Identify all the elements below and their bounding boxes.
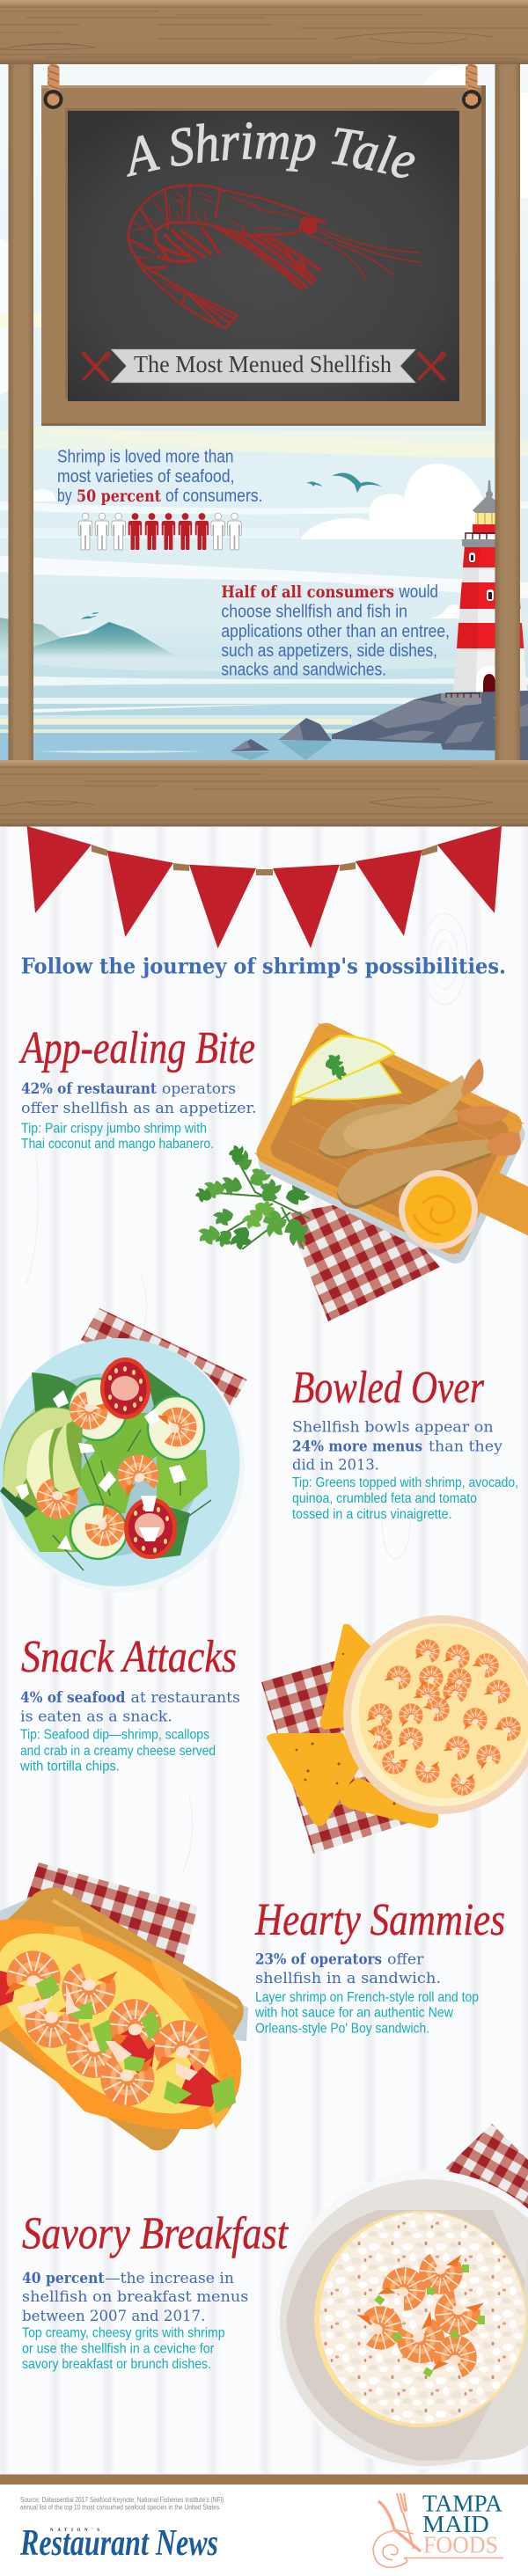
logo: Tampa Maid Foods: MAID [422, 2511, 489, 2537]
logo: Tampa Maid Foods: FOODS [423, 2532, 498, 2558]
logo: Nation's Restaurant News: Restaurant News [19, 2523, 218, 2564]
sauce cup [399, 1170, 478, 1249]
text: shrimp is loved [57, 448, 262, 506]
rope and rings left [46, 64, 62, 107]
text: breakfast tip: or use the shellfish in a ceviche for [22, 2341, 215, 2356]
rocks [231, 691, 528, 760]
text: bowls stat [292, 1419, 502, 1475]
icon: crossed fork and knife right [419, 352, 445, 379]
text: appetizer stat: operators [162, 1080, 236, 1098]
napkin [20, 1862, 198, 1966]
plate [275, 2170, 528, 2470]
bun [0, 1919, 241, 2129]
text: half of all consumers: choose shellfish and fish in [221, 603, 407, 622]
illustration: salad bowl [0, 1308, 247, 1592]
logo: Tampa Maid Foods: TAMPA [422, 2490, 503, 2516]
logo: Tampa Maid Foods [373, 2490, 503, 2567]
pictogram: 5 of 10 people in red [78, 513, 241, 550]
text: snack tip: and crab in a creamy cheese served [20, 1744, 216, 1759]
lighthouse [453, 480, 527, 699]
text: breakfast stat [22, 2270, 248, 2325]
text: bowls tip: quinoa, crumbled feta and tomato [292, 1491, 477, 1506]
logo: Nation's Restaurant News: NATION'S [50, 2528, 99, 2533]
footer wood strip [0, 2474, 528, 2485]
text: snack stat: is eaten as a snack. [20, 1709, 172, 1726]
heading: bowled over: Bowled Over [292, 1363, 485, 1413]
heading: app-ealing bite: App-ealing Bite [18, 1023, 255, 1073]
text: breakfast stat: shellfish on breakfast menus [22, 2288, 248, 2306]
top wooden beam [0, 0, 528, 64]
text: shrimp is loved: most varieties of seafood, [57, 467, 234, 487]
text: half of all consumers: such as appetizers, side dishes, [221, 641, 437, 661]
text: sandwich stat: offer [387, 1951, 424, 1969]
text: bowls tip [292, 1475, 518, 1522]
text: bowls tip: tossed in a citrus vinaigrette. [292, 1507, 452, 1522]
icon: red shrimp [128, 186, 421, 328]
lemon [293, 1036, 400, 1104]
ribbon text: The Most Menued Shellfish [134, 351, 392, 377]
filling [0, 1899, 245, 2148]
heading: savory breakfast: Savory Breakfast [22, 2209, 289, 2259]
parsley [194, 1145, 312, 1253]
grits shrimp and scallions [351, 2249, 485, 2377]
illustration: shrimp po' boy sandwich [0, 1862, 248, 2150]
source note: annual list of the top 10 most consumed seafood species in the United States. [20, 2504, 221, 2511]
icon: crossed fork and knife left [84, 352, 110, 379]
sign frame [41, 85, 486, 426]
tortilla chips [267, 1624, 438, 1828]
panel: hanging chalkboard sign [41, 85, 486, 426]
board shadow [0, 1892, 248, 2041]
text: half of all consumers: Half of all consumers [221, 583, 394, 602]
text: shrimp is loved: Shrimp is loved more than [57, 448, 234, 467]
lower wooden beam [0, 760, 528, 827]
napkin [286, 1197, 440, 1321]
text: breakfast tip: Top creamy, cheesy grits with shrimp [22, 2326, 225, 2341]
icon: fork, knife and swirl [373, 2493, 503, 2567]
dip shrimp [364, 1639, 525, 1797]
avocado [4, 1407, 83, 1511]
scene: seaside sky and water [0, 53, 528, 765]
text: snack stat [20, 1689, 240, 1726]
text: sandwich tip: with hot sauce for an authentic New [254, 2006, 453, 2021]
text: half of all consumers [221, 582, 450, 680]
text: appetizer tip [21, 1121, 214, 1152]
support posts [9, 62, 520, 762]
napkin [261, 1661, 414, 1854]
text: half of all consumers: would [399, 582, 438, 602]
text: appetizer tip: Tip: Pair crispy jumbo shrimp with [21, 1121, 207, 1136]
ribbon banner [111, 349, 416, 383]
text: sandwich tip [254, 1990, 479, 2037]
heading: snack attacks: Snack Attacks [21, 1632, 237, 1682]
text: appetizer tip: Thai coconut and mango habanero. [21, 1137, 214, 1152]
title: A Shrimp Tale [127, 121, 415, 178]
salad shrimp [34, 1389, 204, 1554]
rope and rings right [464, 64, 480, 107]
icon: seagulls [81, 472, 382, 619]
bunting flags [27, 826, 502, 948]
napkin [444, 2124, 528, 2213]
illustration: shrimp and grits plate [275, 2124, 528, 2470]
text: shrimp is loved: by [57, 487, 72, 506]
text: sandwich stat [255, 1951, 441, 1987]
source note [20, 2496, 224, 2511]
text: sandwich tip: Orleans-style Po' Boy sandwich. [255, 2022, 429, 2037]
tomato slices [100, 1358, 177, 1559]
text: snack tip [19, 1728, 216, 1775]
chalkboard [68, 111, 459, 401]
text: appetizer stat [21, 1080, 257, 1117]
napkin [81, 1308, 247, 1410]
sandwich shrimp and toppings [0, 1950, 236, 2113]
text: appetizer stat: offer shellfish as an appetizer. [21, 1100, 257, 1117]
feta cubes [16, 1390, 187, 1550]
text: snack stat: 4% of seafood [20, 1689, 126, 1707]
text: breakfast tip: savory breakfast or brunch dishes. [22, 2357, 211, 2372]
illustration: seafood dip and chips [261, 1615, 528, 1854]
plate [0, 1339, 245, 1592]
footer background [0, 2485, 528, 2576]
bread board [0, 1887, 244, 2150]
text: bowls stat: Shellfish bowls appear on [292, 1419, 494, 1437]
text: appetizer stat: 42% of restaurant [21, 1080, 157, 1098]
text: half of all consumers: snacks and sandwiches. [221, 661, 386, 680]
dip bowl [343, 1615, 528, 1814]
text: snack stat: at restaurants [130, 1689, 240, 1707]
text: bowls stat: 24% more menus [292, 1438, 422, 1455]
cucumber slices [69, 1379, 204, 1559]
text: half of all consumers: applications other than an entree, [221, 622, 450, 641]
text: snack tip: Tip: Seafood dip—shrimp, scallops [20, 1728, 209, 1743]
text: bowls stat: did in 2013. [292, 1457, 379, 1475]
text: bowls stat: than they [429, 1438, 502, 1455]
background: white wood planks [0, 792, 528, 2481]
text: breakfast stat: between 2007 and 2017. [22, 2308, 205, 2325]
breaded shrimp [319, 1075, 491, 1209]
icon: cloud [26, 464, 495, 618]
text: sandwich tip: Layer shrimp on French-style roll and top [255, 1990, 479, 2005]
text: breakfast tip [22, 2326, 225, 2372]
grits [314, 2211, 527, 2427]
greens [0, 1369, 211, 1570]
source note: Source: Datassential 2017 Seafood Keynote; National Fisheries Institute's (NFI) [20, 2496, 224, 2504]
sea bands [0, 657, 528, 761]
illustration: fried shrimp on cutting board [194, 1019, 528, 1321]
text: shrimp is loved: of consumers. [165, 487, 262, 506]
text: sandwich stat: 23% of operators [255, 1951, 382, 1969]
hills [0, 618, 176, 656]
text: sandwich stat: shellfish in a sandwich. [255, 1970, 441, 1987]
text: snack tip: with tortilla chips. [19, 1760, 120, 1775]
board [249, 1019, 528, 1295]
text: shrimp is loved: 50 percent [77, 487, 161, 506]
shrimp tails [455, 1058, 521, 1156]
text: breakfast stat: —the increase in [105, 2270, 234, 2287]
text: breakfast stat: 40 percent [22, 2270, 105, 2287]
